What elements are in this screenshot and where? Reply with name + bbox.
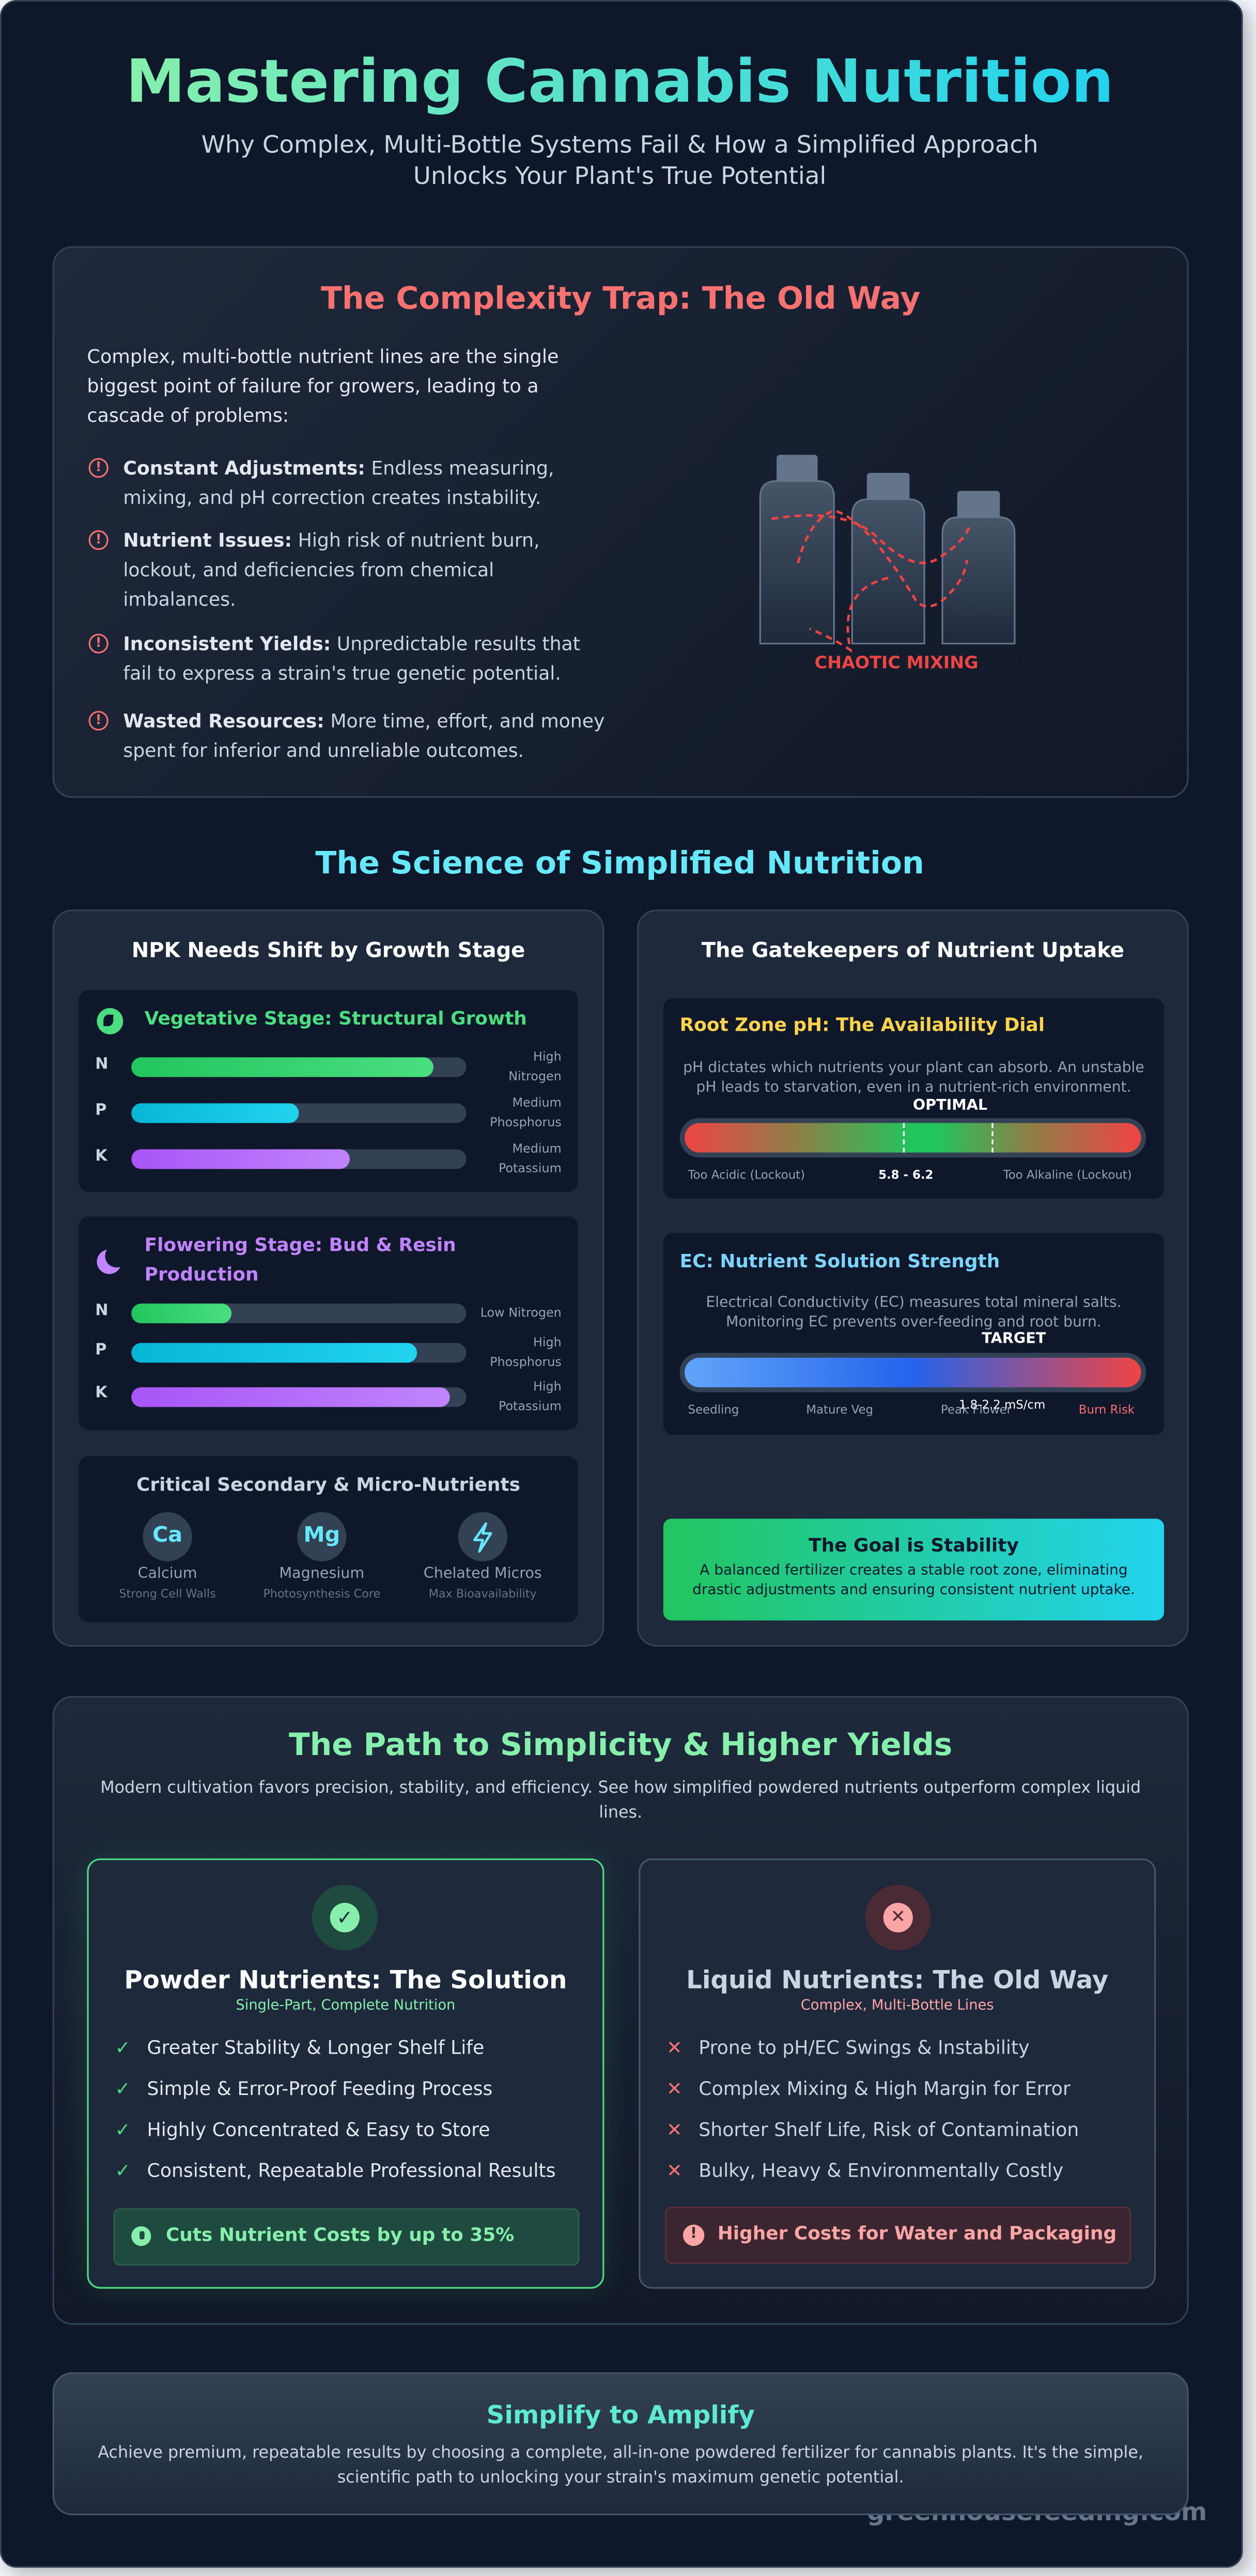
watermark: greenhousefeeding.com [867,2497,1207,2527]
micro item: calcium: Calcium [138,1566,197,1582]
micro heading: Critical Secondary & Micro-Nutrients [136,1475,520,1496]
callout: higher costs: ! [690,2226,697,2243]
box: EC: 1.8-2.2 mS/cm [959,1397,1045,1412]
veg bars: Medium [512,1095,562,1110]
illustration: chaotic mixing bottles [759,455,1016,653]
liquid list: ✕ Shorter Shelf Life, Risk of Contamination [666,2118,1079,2141]
EC text: Electrical Conductivity (EC) measures total mineral salts. [706,1295,1122,1312]
bullet list: problems: spent for inferior and unreliable outcomes. [123,739,524,762]
micro item: magnesium: Photosynthesis Core [263,1588,380,1601]
heading: path: The Path to Simplicity & Higher Yields [289,1729,952,1763]
panel: simplify to amplify [53,2372,1189,2515]
closing text: scientific path to unlocking your strain's maximum genetic potential. [337,2469,904,2487]
powder list: ✓ Simple & Error-Proof Feeding Process [115,2077,492,2100]
box: micronutrients [79,1456,578,1622]
micro item: chelated [424,1512,542,1601]
label optimal: OPTIMAL [913,1098,987,1115]
liquid list [666,2034,1143,2182]
intro text [54,1776,1187,1826]
bullet: nutrient issues [89,529,539,611]
heading: science of simplified nutrition: The Science of Simplified Nutrition [315,846,924,881]
flower bars: N [95,1302,108,1320]
heading: simplify: Simplify to Amplify [487,2400,755,2430]
EC heading: EC: Nutrient Solution Strength [680,1251,1000,1273]
box: EC: Peak Flower [941,1402,1012,1417]
flower bars: Potassium [499,1399,562,1414]
flower bars: High [533,1335,562,1349]
flower bars: High [533,1379,562,1394]
intro text: biggest point of failure for growers, leading to a [87,375,539,397]
EC bar [680,1353,1146,1392]
flower bars: K [95,1384,107,1402]
closing text: Achieve premium, repeatable results by choosing a complete, all-in-one powdered fertilizer for cannabis plants. It's the simple, [98,2445,1143,2463]
EC text [663,1294,1164,1333]
bullet list: problems: Wasted Resources: More time, effort, and money [123,709,604,732]
icon: x: ✕ [891,1906,906,1928]
flower bars [95,1302,562,1414]
intro text [87,345,559,427]
bullet list: problems: mixing, and pH correction creates instability. [123,486,541,509]
box: vegetative stage [79,990,578,1192]
flower heading: Flowering Stage: Bud & Resin [145,1235,456,1256]
callout: cuts costs: Cuts Nutrient Costs by up to 35% [166,2225,514,2246]
veg bars: High [533,1049,562,1064]
veg bars: P [95,1101,106,1120]
card: liquid nutrients [639,1858,1156,2289]
panel: complexity trap [53,246,1189,798]
bullet list: problems: imbalances. [123,588,236,611]
powder list: ✓ Greater Stability & Longer Shelf Life [115,2036,484,2059]
intro text: cascade of problems: [87,404,289,427]
icon: check: ✓ [336,1906,353,1929]
pH labels: Too Acidic (Lockout) [688,1167,805,1182]
veg bars: Phosphorus [490,1115,562,1129]
liquid list: ✕ Prone to pH/EC Swings & Instability [666,2036,1030,2059]
bullet: constant adjustments [89,456,554,509]
callout: goal is stability [663,1518,1164,1620]
flower heading [145,1235,456,1285]
micro item: chelated: Chelated Micros [424,1566,542,1582]
intro text: Complex, multi-bottle nutrient lines are the single [87,345,559,368]
subtitle: Why Complex, Multi-Bottle Systems Fail & How a Simplified Approach [201,131,1038,159]
callout: higher costs: Higher Costs for Water and Packaging [718,2223,1117,2244]
micro item: chelated: Max Bioavailability [429,1588,537,1601]
micro item: calcium: Strong Cell Walls [119,1588,216,1601]
bullet: inconsistent yields [89,632,580,685]
icon: moon [97,1249,121,1274]
bullet list: problems: fail to express a strain's true genetic potential. [123,662,561,685]
closing text [54,2441,1187,2491]
pH text [683,1061,1144,1097]
bullet list: problems: ! [96,635,101,650]
box: flowering stage [79,1217,578,1430]
callout: goal is stability: A balanced fertilizer creates a stable root zone, eliminating [700,1563,1128,1579]
bullet: wasted resources [89,709,604,762]
box: pH [663,998,1164,1199]
powder list: ✓ Consistent, Repeatable Professional Results [115,2159,555,2182]
heading: NPK: NPK Needs Shift by Growth Stage [132,938,525,962]
pH text: pH dictates which nutrients your plant can absorb. An unstable [683,1061,1144,1077]
liquid list: ✕ Bulky, Heavy & Environmentally Costly [666,2159,1063,2182]
EC text: Monitoring EC prevents over-feeding and root burn. [726,1315,1102,1331]
pH heading: Root Zone pH: The Availability Dial [680,1015,1045,1036]
heading: complexity trap: The Complexity Trap: The Old Way [321,281,920,317]
veg bars: Medium [512,1141,562,1156]
icon: leaf [97,1008,123,1034]
liquid list: ✕ Complex Mixing & High Margin for Error [666,2077,1071,2100]
flower heading: Production [145,1264,259,1285]
box: pH: Too Alkaline (Lockout) [1003,1167,1132,1182]
callout: cuts costs [113,2208,580,2265]
pH bar [680,1118,1146,1157]
veg bars: K [95,1147,107,1166]
flower bars: P [95,1341,106,1359]
veg bars: Potassium [499,1161,562,1175]
powder list [115,2034,591,2182]
bullet list: problems: ! [96,712,101,727]
title: Mastering Cannabis Nutrition [126,46,1114,117]
box: pH: 5.8 - 6.2 [878,1167,933,1182]
bullet list: problems: ! [96,532,101,547]
veg heading: Vegetative Stage: Structural Growth [145,1008,527,1029]
panel: path to simplicity [53,1696,1189,2325]
veg bars: Nitrogen [508,1069,562,1083]
micro item: calcium [119,1512,216,1601]
subtitle [201,131,1038,191]
micro item: magnesium: Mg [303,1524,340,1548]
icon: x [865,1885,931,1950]
bullet list: problems: ! [96,460,101,474]
powder subtitle: Single-Part, Complete Nutrition [236,1998,455,2014]
veg bars [95,1049,562,1175]
bullet list: problems: lockout, and deficiencies from chemical [123,558,494,581]
intro text: Modern cultivation favors precision, stability, and efficiency. See how simplified powdered nutrients outperform complex liquid [100,1780,1141,1798]
flower bars: Low Nitrogen [480,1305,562,1320]
bullet list: problems: Inconsistent Yields: Unpredictable results that [123,632,580,655]
callout: goal is stability: The Goal is Stability [809,1535,1019,1557]
EC labels: Seedling [688,1402,739,1417]
veg bars: N [95,1056,108,1074]
icon: check [312,1885,378,1950]
subtitle: Unlocks Your Plant's True Potential [413,163,826,191]
liquid title: Liquid Nutrients: The Old Way [686,1965,1108,1995]
heading: gatekeepers: The Gatekeepers of Nutrient Uptake [702,938,1124,962]
label target: TARGET [982,1331,1046,1348]
liquid subtitle: Complex, Multi-Bottle Lines [801,1998,994,2014]
bullet list: problems: Nutrient Issues: High risk of nutrient burn, [123,529,539,552]
intro text: lines. [599,1804,642,1822]
label: chaotic mixing: CHAOTIC MIXING [815,654,979,673]
callout: goal is stability: drastic adjustments and ensuring consistent nutrient uptake. [692,1582,1135,1599]
micro item: magnesium: Magnesium [279,1566,364,1582]
panel: gatekeepers [637,909,1189,1647]
bullet list: problems [89,456,604,762]
card: powder nutrients [87,1858,604,2289]
micro item: calcium: Ca [152,1524,182,1548]
panel: NPK needs [53,909,604,1647]
callout: higher costs [665,2207,1131,2264]
box: EC: Mature Veg [806,1402,873,1417]
box: EC: Burn Risk [1079,1402,1135,1417]
flower bars: Phosphorus [490,1355,562,1369]
micro item: magnesium [263,1512,380,1601]
box: EC [663,1233,1164,1435]
powder list: ✓ Highly Concentrated & Easy to Store [115,2118,490,2141]
powder title: Powder Nutrients: The Solution [124,1965,567,1995]
pH text: pH leads to starvation, even in a nutrient-rich environment. [696,1080,1131,1097]
bullet list: problems: Constant Adjustments: Endless measuring, [123,456,554,479]
